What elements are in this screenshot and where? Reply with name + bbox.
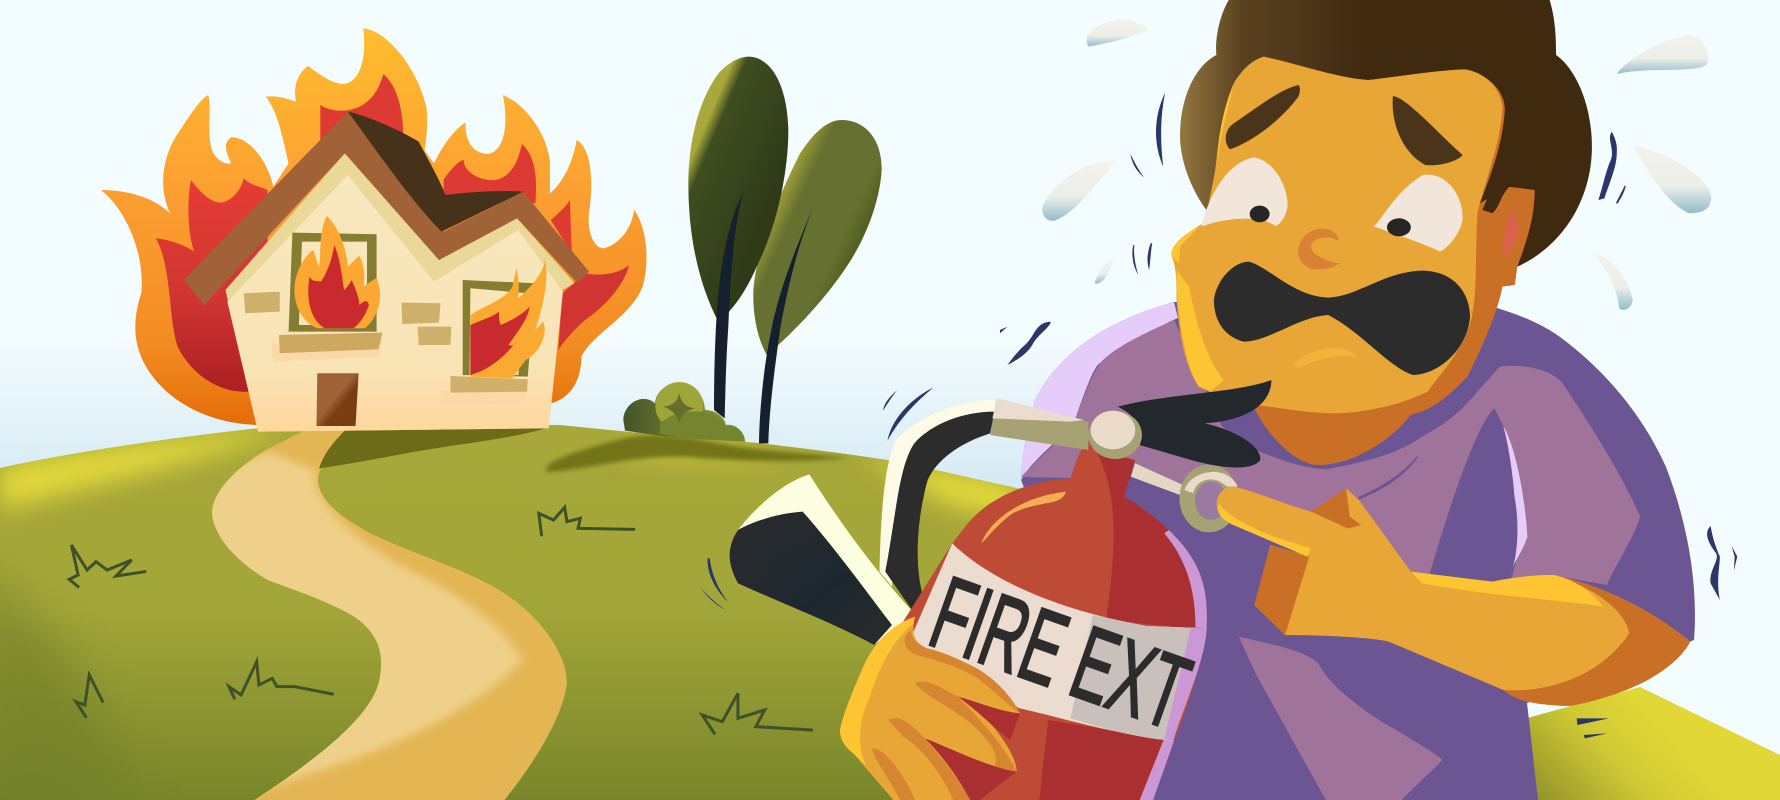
tank highlight	[981, 492, 1066, 543]
extinguisher tank	[887, 442, 1207, 800]
nozzle horn	[730, 474, 914, 645]
tank dark side	[1097, 453, 1207, 630]
red inner flames	[156, 74, 629, 392]
nose	[1298, 229, 1339, 269]
dark red under fingers	[925, 697, 1020, 800]
shake lines	[1000, 93, 1626, 365]
neck and head shade	[1254, 57, 1535, 465]
left tufts group	[69, 507, 634, 717]
body shake lines	[700, 387, 1737, 738]
tank label	[910, 543, 1207, 741]
winding path	[212, 430, 567, 800]
grass tufts	[69, 507, 812, 733]
tree: right	[753, 120, 882, 443]
ear mark	[1502, 207, 1520, 255]
valve knob	[1088, 411, 1142, 459]
right eyebrow	[1393, 96, 1463, 165]
chin crease	[1293, 348, 1357, 368]
arm highlight	[1411, 572, 1603, 607]
right eye	[1374, 175, 1463, 252]
bricks	[244, 292, 451, 345]
house wall	[225, 153, 574, 432]
extinguisher lines	[700, 387, 933, 610]
right arm and pointing hand	[1217, 487, 1690, 706]
distant right hill	[1500, 687, 1780, 800]
tank pink edge	[1164, 530, 1207, 628]
hand yellow edge	[840, 617, 915, 767]
knuckle shade	[1311, 488, 1361, 528]
pull pin	[1131, 463, 1238, 532]
hair	[1180, 0, 1592, 267]
finger shading	[872, 630, 1020, 800]
hose	[879, 400, 995, 610]
extinguisher hose and horn	[730, 400, 995, 645]
tree shadow on hill	[546, 435, 850, 472]
black lever	[1117, 380, 1271, 467]
shirt lilac streak and crease	[1357, 427, 1527, 573]
shirt mauve panels	[1021, 320, 1640, 800]
outer flames	[101, 28, 647, 425]
face	[1171, 57, 1502, 413]
sweat drops	[1042, 19, 1711, 310]
left window with flames	[271, 216, 382, 362]
hill shadow under house	[319, 425, 549, 468]
tuft by extinguisher	[702, 693, 812, 733]
hand facet	[1254, 545, 1309, 635]
right arm lines	[1577, 526, 1737, 738]
left hand gripping tank	[840, 617, 1020, 800]
left eyebrow	[1226, 85, 1300, 149]
roof	[183, 112, 589, 305]
hand	[840, 617, 1020, 800]
right window with flames	[440, 260, 546, 405]
lilac shirt rim	[1021, 302, 1178, 480]
valve tube	[990, 398, 1088, 450]
burning house	[101, 28, 647, 432]
bush	[623, 382, 745, 442]
door	[317, 373, 359, 426]
left eye	[1201, 157, 1288, 227]
trees	[623, 57, 882, 443]
man's head	[1171, 0, 1592, 465]
sideburn	[1482, 173, 1509, 213]
burnt roof section	[348, 112, 523, 232]
tank body	[887, 442, 1207, 800]
arm shadow	[1503, 575, 1690, 706]
extinguisher valve, lever, pin	[990, 380, 1271, 532]
finger highlight	[1218, 503, 1311, 557]
tree: left	[688, 57, 788, 418]
main hill	[0, 425, 1020, 800]
sweat drops and head shake lines	[1000, 19, 1711, 365]
man's torso in purple shirt	[1021, 302, 1695, 800]
face yellow edge	[1171, 83, 1234, 391]
open mouth	[1214, 262, 1470, 375]
